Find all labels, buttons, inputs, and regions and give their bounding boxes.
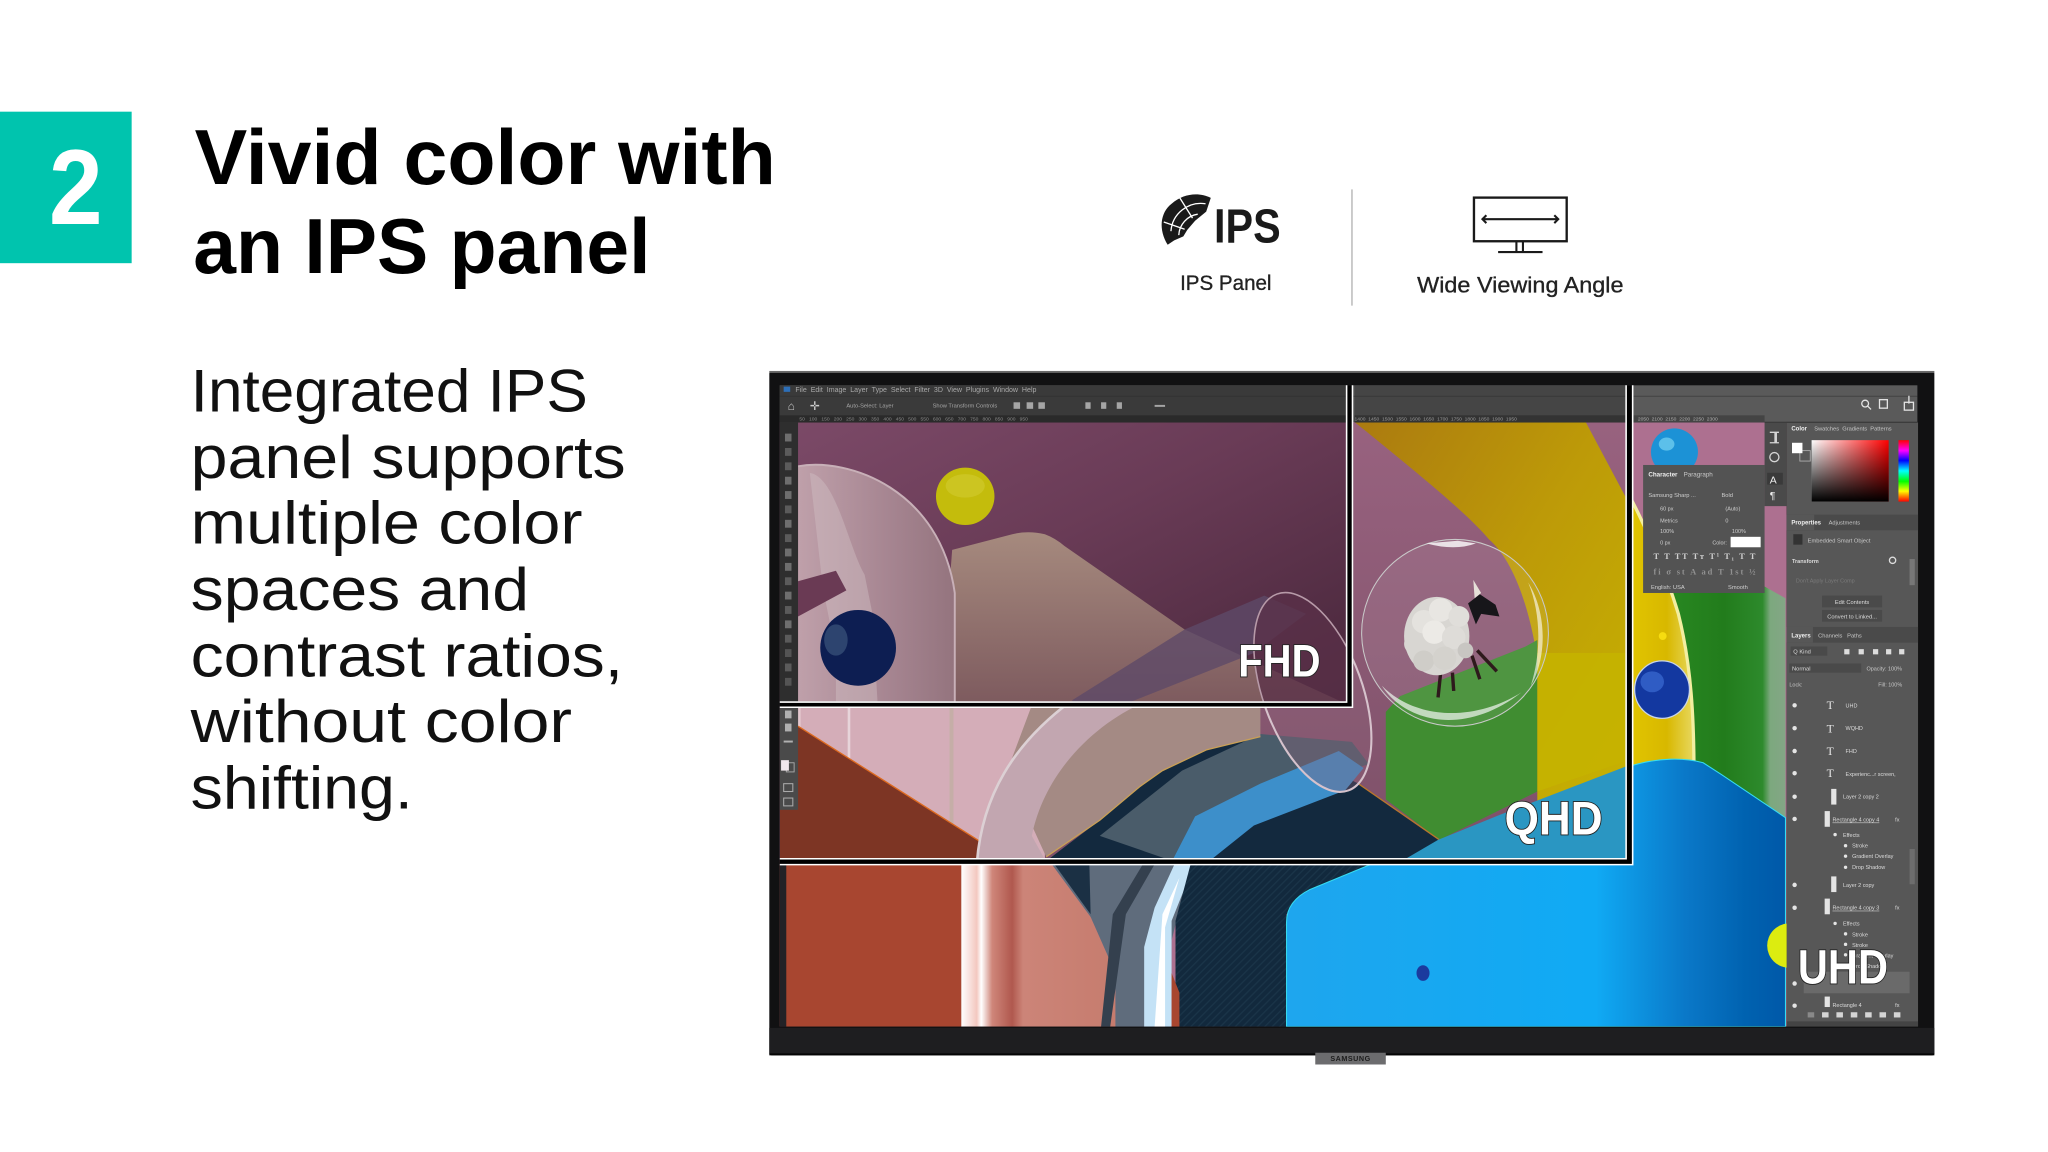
color panel: Swatches Gradients Patterns xyxy=(1814,426,1892,432)
step number badge: 2 xyxy=(49,127,103,247)
body text: Integrated IPS xyxy=(191,356,588,424)
color panel xyxy=(1791,426,1909,502)
label: Wide Viewing Angle: Wide Viewing Angle xyxy=(1417,273,1624,298)
layers panel: Rectangle 4 copy 3 xyxy=(1832,906,1879,912)
character panel: 60 px xyxy=(1660,507,1674,513)
icon strip xyxy=(1765,423,1787,506)
layers panel: Drop Shadow xyxy=(1852,964,1885,970)
properties panel: Convert to Linked... xyxy=(1827,614,1877,620)
character panel: 100% xyxy=(1732,529,1746,535)
application top bar: 2050 2100 2150 2200 2250 2300 xyxy=(1638,417,1718,423)
layers panel: fx xyxy=(1895,906,1900,912)
layers panel: Fill: 100% xyxy=(1878,682,1902,688)
layers panel: Layer 2 copy xyxy=(1843,883,1875,889)
properties panel: Transform xyxy=(1792,559,1819,565)
character panel: 0 xyxy=(1725,518,1728,524)
layers panel: Effects xyxy=(1843,833,1860,839)
body text: without color xyxy=(190,687,572,755)
character panel: Samsung Sharp ... xyxy=(1648,493,1696,499)
body text: shifting. xyxy=(191,753,413,821)
artwork: bubble and sheep xyxy=(1362,539,1548,726)
layers panel: Gradient Overlay xyxy=(1852,854,1894,860)
application top bar xyxy=(780,385,1917,423)
properties panel: Adjustments xyxy=(1829,520,1860,526)
divider xyxy=(1351,189,1353,306)
layers panel: WQHD xyxy=(1846,726,1863,732)
properties panel: Don't Apply Layer Comp xyxy=(1796,579,1855,585)
layers panel: T xyxy=(1827,767,1834,780)
character panel: 100% xyxy=(1660,529,1674,535)
layers panel: Drop Shadow xyxy=(1852,865,1885,871)
monitor bezel xyxy=(769,371,1934,1055)
label: QHD: QHD xyxy=(1505,792,1603,845)
left toolbar xyxy=(780,422,798,810)
right side panels xyxy=(1765,422,1918,1027)
layers panel: Gradient Overlay xyxy=(1852,953,1894,959)
layers panel: Layer 2 copy 2 xyxy=(1843,795,1879,801)
character panel: T T TT Tт T¹ T₁ T T xyxy=(1654,551,1756,561)
properties panel: Edit Contents xyxy=(1835,600,1869,606)
body text: spaces and xyxy=(191,555,529,623)
layers panel xyxy=(1787,627,1918,1027)
layers panel: Q Kind xyxy=(1793,650,1811,656)
layers panel: Rectangle 4 xyxy=(1832,1003,1862,1009)
monitor logo badge xyxy=(1315,1053,1386,1064)
layers panel: Stroke xyxy=(1852,932,1868,938)
application top bar: Auto-Select: Layer xyxy=(846,404,894,410)
icon text: IPS: IPS xyxy=(1214,199,1281,253)
character panel: Smooth xyxy=(1728,585,1748,591)
feature: IPS panel xyxy=(1162,194,1281,295)
screen artwork xyxy=(780,422,1812,1027)
artwork: QHD layer xyxy=(780,422,1629,862)
character panel: (Auto) xyxy=(1725,507,1740,513)
title: an IPS panel xyxy=(193,202,650,290)
icon: monitor with arrow xyxy=(1474,198,1567,252)
properties panel: Properties xyxy=(1791,520,1822,526)
feature: wide viewing angle xyxy=(1417,198,1624,298)
monitor logo badge: SAMSUNG xyxy=(1330,1055,1371,1063)
icon strip: ¶ xyxy=(1770,491,1776,502)
monitor xyxy=(769,371,1934,1064)
character panel: Character xyxy=(1648,472,1678,479)
layers panel: Stroke xyxy=(1852,844,1868,850)
icon: IPS fan logo xyxy=(1162,194,1211,245)
application top bar: 50 100 150 200 250 300 350 400 450 500 550 600 650 700 750 800 850 900 950 xyxy=(799,417,1028,423)
layers panel: fx xyxy=(1895,1003,1900,1009)
title xyxy=(193,113,776,290)
properties panel: Embedded Smart Object xyxy=(1808,539,1871,545)
layers panel: Channels Paths xyxy=(1818,633,1862,639)
character panel: 0 px xyxy=(1660,541,1671,547)
label: IPS Panel: IPS Panel xyxy=(1180,272,1272,295)
character panel: English: USA xyxy=(1651,585,1685,591)
layers panel: fx xyxy=(1895,818,1900,824)
body text: multiple color xyxy=(191,488,583,556)
resolution frame: FHD xyxy=(780,385,1352,707)
body text: contrast ratios, xyxy=(191,622,623,690)
title: Vivid color with xyxy=(195,113,776,201)
application top bar: File Edit Image Layer Type Select Filter 3D View Plugins Window Help xyxy=(795,387,1037,394)
step number badge xyxy=(0,112,132,263)
layers panel: Rectangle 4 copy 4 xyxy=(1832,818,1879,824)
layers panel: Effects xyxy=(1843,921,1860,927)
artwork: FHD layer xyxy=(798,422,1346,702)
layers panel: FHD xyxy=(1846,749,1857,755)
color panel: Color xyxy=(1791,426,1808,432)
body text: panel supports xyxy=(191,423,626,491)
layers panel: T xyxy=(1827,723,1834,736)
infographic canvas xyxy=(0,112,1934,1064)
layers panel: T xyxy=(1827,699,1834,712)
application top bar: ⌂ xyxy=(788,400,795,413)
character panel xyxy=(1643,465,1765,593)
application top bar: ✛ xyxy=(810,400,820,413)
character panel: Paragraph xyxy=(1684,472,1713,479)
body text xyxy=(190,356,626,821)
layers panel: T xyxy=(1827,745,1834,758)
layers panel: Experienc...r screen, xyxy=(1846,772,1896,778)
layers panel: UHD xyxy=(1846,703,1857,709)
character panel: Metrics xyxy=(1660,518,1678,524)
layers panel: Opacity: 100% xyxy=(1866,667,1902,673)
character panel: fi σ st A ad T 1st ½ xyxy=(1654,567,1756,577)
application top bar: 1400 1450 1500 1550 1600 1650 1700 1750 1800 1850 1900 1950 xyxy=(1354,417,1517,423)
label: UHD: UHD xyxy=(1798,941,1888,995)
layers panel: Stroke xyxy=(1852,943,1868,949)
resolution frame: QHD xyxy=(780,385,1633,865)
layers panel: Layers xyxy=(1791,633,1811,639)
character panel: Color: xyxy=(1712,541,1727,547)
character panel: Bold xyxy=(1721,493,1733,499)
application top bar: Show Transform Controls xyxy=(933,404,997,410)
label: FHD: FHD xyxy=(1238,636,1320,687)
layers panel: Normal xyxy=(1792,667,1810,673)
artwork: full brightness UHD layer xyxy=(780,422,1812,1027)
icon strip: A xyxy=(1770,475,1777,486)
layers panel: Lock: xyxy=(1789,682,1803,688)
properties panel xyxy=(1787,515,1918,622)
